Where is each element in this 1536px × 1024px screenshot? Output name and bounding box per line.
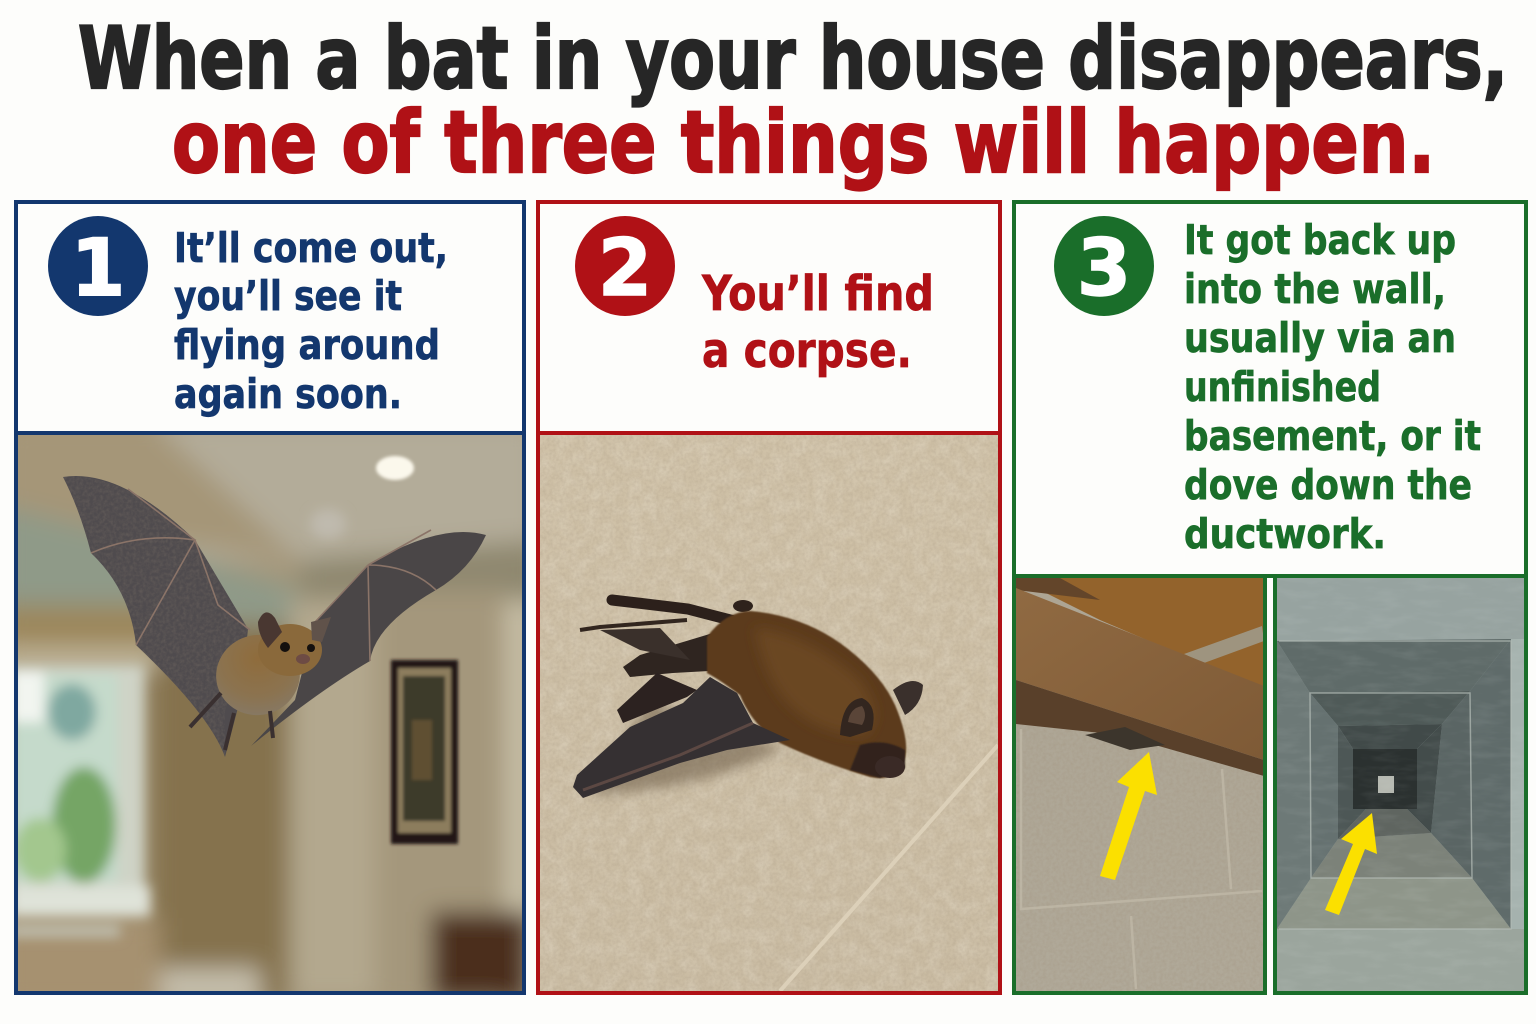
text: panel 1: It’ll come out, (174, 224, 448, 272)
number badge 2 (575, 216, 675, 316)
text: panel 2 (701, 266, 934, 379)
panel 3 frame (1014, 202, 1526, 993)
photo: bat flying in a room (18, 435, 522, 991)
number badge 3: 3 (1077, 224, 1131, 314)
yellow arrow (1100, 752, 1157, 880)
yellow arrow (1325, 813, 1377, 915)
bat (573, 600, 923, 798)
text: panel 3: It got back up (1184, 216, 1456, 264)
photo: ductwork (1277, 578, 1524, 991)
number badge 3 (1054, 216, 1154, 316)
photo: dead bat on carpet (540, 434, 998, 991)
panel 1 frame (16, 202, 524, 993)
text: panel 2: a corpse. (702, 323, 912, 379)
text: panel 1: flying around (174, 321, 440, 369)
text: panel 3: into the wall, (1184, 265, 1446, 313)
text: panel 3: unfinished (1184, 363, 1381, 411)
text: panel 1 (174, 224, 448, 418)
text: panel 3: dove down the (1184, 461, 1472, 509)
window (10, 665, 150, 937)
panel 2 frame (538, 202, 1000, 993)
number badge 1 (48, 216, 148, 316)
ceiling light (376, 456, 414, 480)
text: panel 2: You’ll find (701, 266, 934, 322)
number badge 1: 1 (71, 224, 125, 314)
panel 1: it comes out (0, 202, 540, 1010)
text: panel 3: ductwork. (1184, 510, 1386, 558)
text: panel 1: again soon. (174, 370, 402, 418)
title (78, 9, 1508, 193)
text: panel 3: usually via an (1184, 314, 1456, 362)
text: panel 1: you’ll see it (174, 272, 402, 320)
number badge 2: 2 (598, 224, 652, 314)
text: panel 3 (1184, 216, 1481, 558)
picture frame (391, 660, 458, 844)
bat (60, 470, 486, 760)
panel 2: a corpse (538, 202, 1000, 993)
photo: basement wall gap (1016, 578, 1264, 991)
text: panel 3: basement, or it (1184, 412, 1481, 460)
panel 3: back into the wall (1014, 202, 1526, 993)
